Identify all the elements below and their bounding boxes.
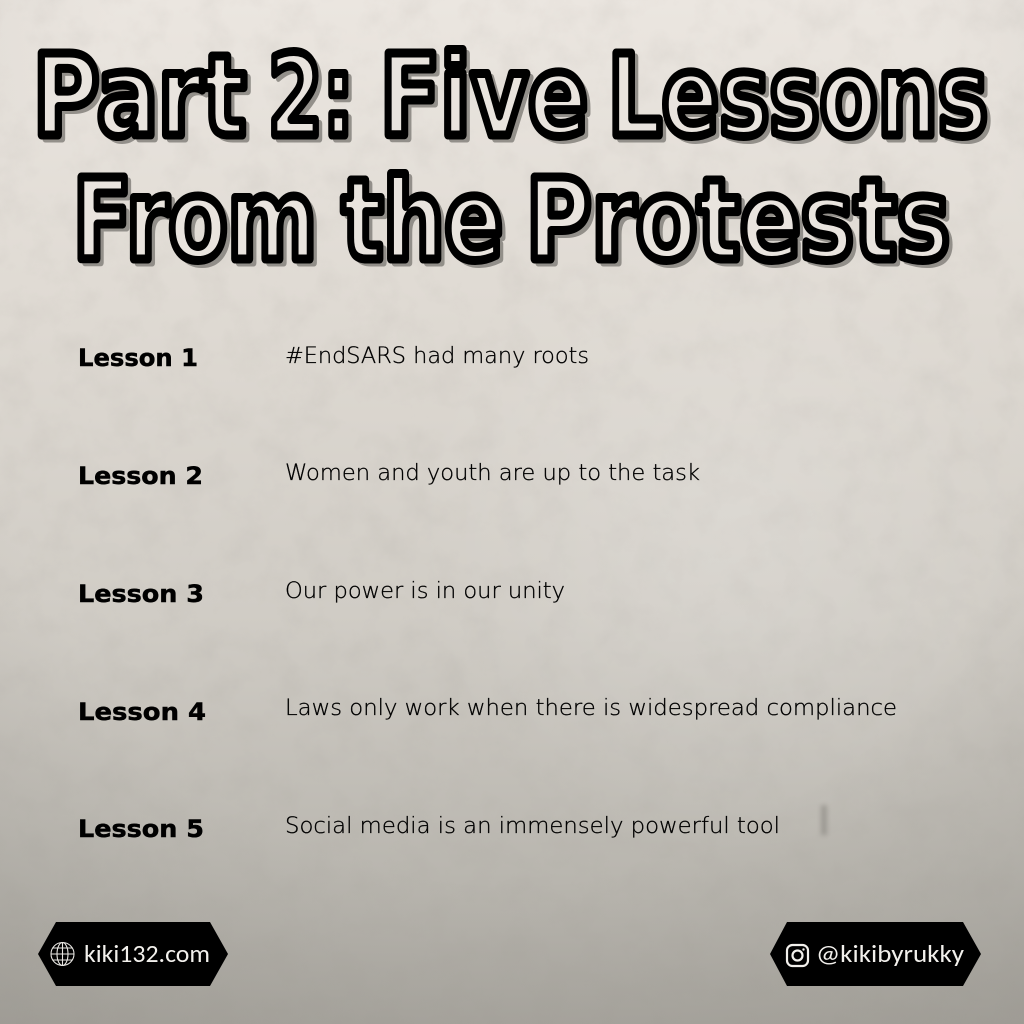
title text: 2: xyxy=(268,32,354,162)
title shadow: 2: xyxy=(272,36,358,166)
title text: the xyxy=(342,156,503,286)
lesson 1 row: #EndSARS had many roots xyxy=(285,344,589,369)
title shadow xyxy=(37,36,992,290)
title shadow: Five xyxy=(384,36,592,166)
lesson 2 row xyxy=(78,461,700,490)
icon: instagram xyxy=(787,945,808,966)
lesson 4 row: Laws only work when there is widespread compliance xyxy=(285,696,897,721)
lesson 5 row xyxy=(78,814,780,843)
title shadow: From xyxy=(77,160,321,290)
lesson 2 row: Women and youth are up to the task xyxy=(285,461,700,486)
instagram badge xyxy=(770,922,981,986)
lesson 5 row: Lesson 5 xyxy=(78,815,204,843)
icon: globe xyxy=(51,942,74,966)
title text: From xyxy=(73,156,317,286)
instagram badge: @kikibyrukky xyxy=(816,938,965,969)
website badge: kiki132.com xyxy=(84,938,210,969)
website badge xyxy=(38,922,228,986)
lesson 1 row xyxy=(78,344,589,372)
lesson 4 row xyxy=(78,696,897,726)
lesson 3 row xyxy=(78,579,565,608)
title text: Part xyxy=(33,32,246,162)
lesson 5 row: Social media is an immensely powerful tool xyxy=(285,814,780,839)
title text: Five xyxy=(380,32,588,162)
lesson 1 row: Lesson 1 xyxy=(78,344,198,372)
lesson 3 row: Lesson 3 xyxy=(78,580,204,608)
lesson 3 row: Our power is in our unity xyxy=(285,579,565,604)
title shadow: Part xyxy=(37,36,250,166)
lesson 2 row: Lesson 2 xyxy=(78,462,203,490)
title text xyxy=(33,32,988,286)
lesson 4 row: Lesson 4 xyxy=(78,698,206,726)
title shadow: the xyxy=(346,160,507,290)
title xyxy=(33,32,992,290)
